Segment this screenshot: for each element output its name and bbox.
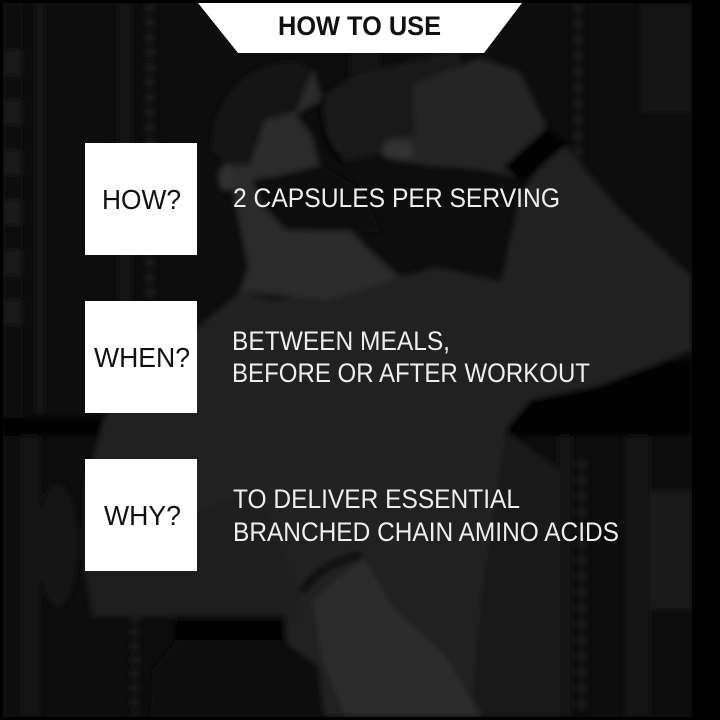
label box: when: WHEN? [94,342,190,373]
hair [211,62,312,165]
ear [218,165,234,191]
text: when: BEFORE OR AFTER WORKOUT [232,358,590,388]
shirt torso [85,267,692,717]
label box: how: HOW? [102,184,181,215]
title banner [198,3,522,53]
label box: how [85,143,197,255]
label box: why [85,459,197,571]
label box: why: WHY? [104,500,181,531]
face [230,70,324,186]
wrist band [505,130,568,180]
text: when [232,326,590,388]
neck [230,180,400,300]
shaker cup [321,50,470,162]
gym backdrop columns [20,434,22,436]
forearm and hand [312,558,482,717]
text: why: BRANCHED CHAIN AMINO ACIDS [233,517,619,547]
title: HOW TO USE [278,11,441,41]
lower right shirt fade [482,428,560,717]
beard [252,165,350,232]
label box: when [85,301,197,413]
thumb [382,141,414,159]
raised arm [500,144,690,300]
text: why [233,484,619,547]
text: how: 2 CAPSULES PER SERVING [233,183,560,213]
text: why: TO DELIVER ESSENTIAL [233,484,520,514]
left forearm sleeve [85,576,281,622]
hand [382,58,546,178]
tub [174,615,326,717]
text: when: BETWEEN MEALS, [232,326,450,356]
